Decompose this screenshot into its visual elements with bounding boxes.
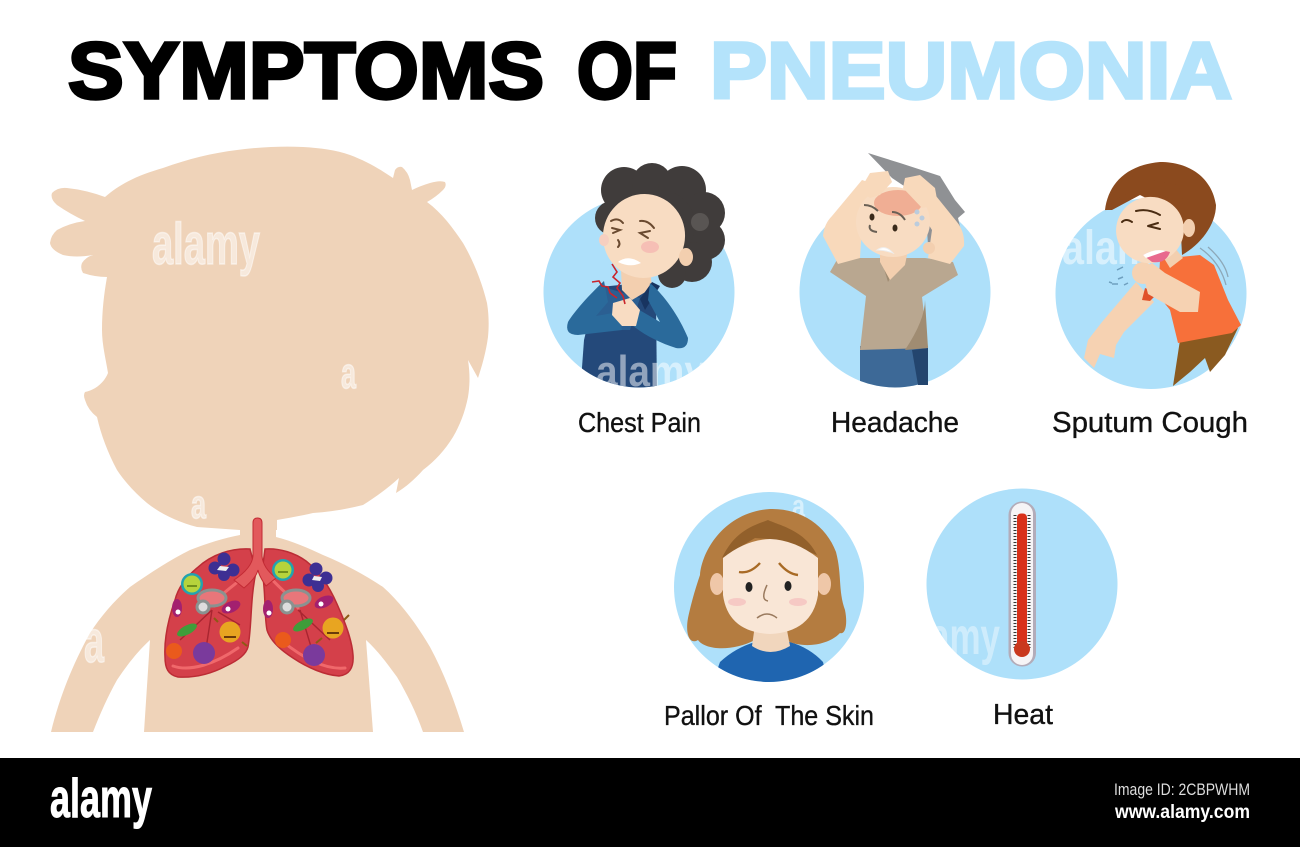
motion lines <box>1200 247 1228 285</box>
circle background <box>926 488 1118 680</box>
website: www.alamy.com <box>1114 802 1250 823</box>
facial features <box>611 219 654 247</box>
germ: grey rings <box>197 590 310 613</box>
bent forearm <box>1142 263 1200 312</box>
title: OF <box>577 26 677 115</box>
shirt <box>1158 255 1241 343</box>
head silhouette <box>50 147 489 530</box>
jeans <box>860 346 928 388</box>
germ: yellow <box>214 615 349 646</box>
title <box>68 26 1232 115</box>
icon: man with headache <box>823 153 965 395</box>
watermark on head: a <box>341 349 356 398</box>
image id: Image ID: 2CBPWHM <box>1114 780 1250 799</box>
watermark on head: a <box>191 483 207 527</box>
panel: chest pain <box>544 163 734 438</box>
label: Chest Pain <box>578 407 701 438</box>
panel: pallor of the skin <box>664 488 874 731</box>
forearms and arms <box>823 180 886 264</box>
pain lightning <box>592 264 625 304</box>
pants <box>1173 328 1238 386</box>
footer logo: alamy <box>50 767 152 829</box>
circle background <box>1056 198 1246 389</box>
right lung <box>262 549 353 676</box>
facial features <box>746 581 792 592</box>
shirt <box>718 642 824 682</box>
collar <box>640 282 660 310</box>
germ: orange <box>166 632 291 659</box>
panel: headache <box>800 153 990 439</box>
panel: body silhouette with lungs <box>50 147 489 732</box>
neck <box>1162 248 1183 268</box>
germ: green rods <box>175 616 315 639</box>
germs in lungs <box>166 552 349 666</box>
ear <box>1183 219 1195 237</box>
icon: pale girl <box>687 509 846 690</box>
left sleeve <box>567 281 622 335</box>
germ: green <box>181 573 203 595</box>
hair <box>868 153 965 252</box>
head <box>856 187 930 257</box>
hands <box>860 171 892 198</box>
right sleeve <box>632 283 688 348</box>
facial features <box>870 214 898 232</box>
watermark on head: a <box>84 608 104 675</box>
label: Sputum Cough <box>1052 407 1248 439</box>
fist <box>1132 262 1154 284</box>
panel: heat <box>926 488 1118 731</box>
panel: sputum cough <box>1052 162 1248 439</box>
shirt <box>830 258 958 350</box>
circle background <box>674 492 864 682</box>
watermark on head <box>84 212 356 675</box>
title: PNEUMONIA <box>710 26 1232 115</box>
circle watermark: alam <box>1062 222 1152 275</box>
face <box>595 186 693 286</box>
lung highlights <box>173 570 345 668</box>
neck <box>880 250 908 280</box>
face <box>1109 189 1191 271</box>
sweat <box>914 210 924 226</box>
icon: boy coughing <box>1084 162 1241 386</box>
hand <box>612 298 640 326</box>
body <box>582 284 657 388</box>
germ: purple <box>193 642 325 666</box>
icon: thermometer <box>1008 502 1036 666</box>
circle watermark: alamy <box>596 347 706 396</box>
footer bar <box>0 758 1300 847</box>
hair <box>687 509 846 648</box>
left lung <box>165 549 256 677</box>
trachea <box>234 518 276 588</box>
extended arm <box>1084 282 1154 368</box>
neck <box>621 268 652 300</box>
hair <box>595 163 725 288</box>
torso and arms silhouette <box>51 520 464 732</box>
germ: pink rods <box>172 593 335 618</box>
circle watermark: amy <box>930 608 1000 666</box>
label: Heat <box>993 699 1053 731</box>
circle watermark: a <box>792 488 805 524</box>
ear <box>923 242 935 254</box>
watermark on head: alamy <box>152 212 260 277</box>
title: SYMPTOMS <box>68 26 544 115</box>
neck <box>752 625 790 652</box>
forehead redness <box>874 190 922 216</box>
facial features <box>1122 210 1160 229</box>
face <box>723 539 818 634</box>
sleeve <box>1142 288 1158 301</box>
circle background <box>544 196 734 388</box>
germ: blue clusters <box>208 552 332 592</box>
label: Pallor Of The Skin <box>664 700 874 731</box>
ears <box>710 573 831 595</box>
label: Headache <box>831 407 959 439</box>
cough droplets <box>1109 267 1128 285</box>
hair <box>1105 162 1216 255</box>
lungs <box>165 518 353 677</box>
germ: green right <box>272 559 294 581</box>
icon: woman with chest pain <box>567 163 725 396</box>
ear <box>679 248 693 266</box>
circle background <box>800 196 990 388</box>
